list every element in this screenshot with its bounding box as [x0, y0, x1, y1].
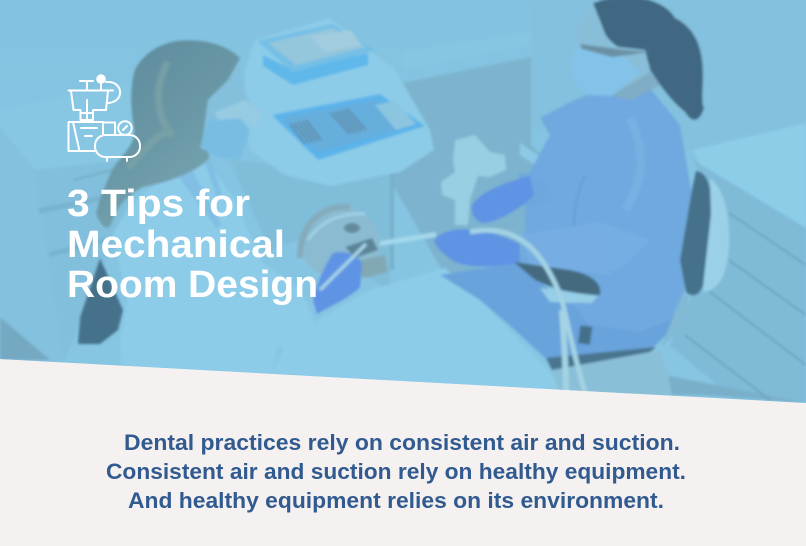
title: Room Design	[67, 264, 318, 306]
left dentist: coat	[113, 160, 317, 374]
right dentist: face and neck	[591, 3, 649, 61]
right dentist: armrest	[514, 262, 600, 295]
patient head	[300, 207, 388, 279]
intro text block	[106, 430, 686, 513]
title	[67, 183, 318, 306]
icon: compressor	[95, 121, 140, 161]
left dentist: seat	[78, 258, 123, 344]
right dentist: tunic	[520, 88, 692, 332]
left dentist: hair	[96, 40, 240, 228]
tray table	[245, 18, 434, 186]
patient sheet	[272, 268, 565, 395]
intro text block: And healthy equipment relies on its environment.	[128, 488, 664, 513]
right dentist: trousers	[440, 262, 680, 358]
bottom text panel background	[0, 340, 806, 546]
floor left	[0, 317, 50, 360]
right dentist: hair	[592, 0, 704, 120]
upper instrument tray	[257, 24, 376, 85]
intro text block: Dental practices rely on consistent air and suction.	[124, 430, 680, 455]
left dentist: face, mask, glasses	[204, 64, 248, 126]
right dentist: sleeve	[520, 227, 576, 238]
suction tube	[380, 232, 436, 246]
suction hoses	[470, 230, 585, 392]
left cabinet	[0, 80, 250, 170]
intro text block: Consistent air and suction rely on healthy equipment.	[106, 459, 686, 484]
right dentist: chair back	[680, 171, 711, 295]
dental unit behind right dentist	[441, 135, 506, 225]
title: Mechanical	[67, 224, 285, 266]
icon: document	[68, 122, 103, 151]
left dentist: glove	[313, 252, 362, 314]
right cabinet	[693, 123, 806, 228]
icon: chair head and arm	[68, 75, 120, 120]
hero photo: dental treatment room with blue overlay	[0, 0, 806, 410]
title: 3 Tips for	[67, 183, 250, 225]
back wall and floor	[531, 0, 806, 150]
right dentist: stool seat and base	[550, 350, 672, 396]
icon: dental chair and compressor	[68, 75, 140, 161]
right dentist: gloves	[472, 176, 534, 223]
lower instrument tray	[272, 94, 425, 160]
